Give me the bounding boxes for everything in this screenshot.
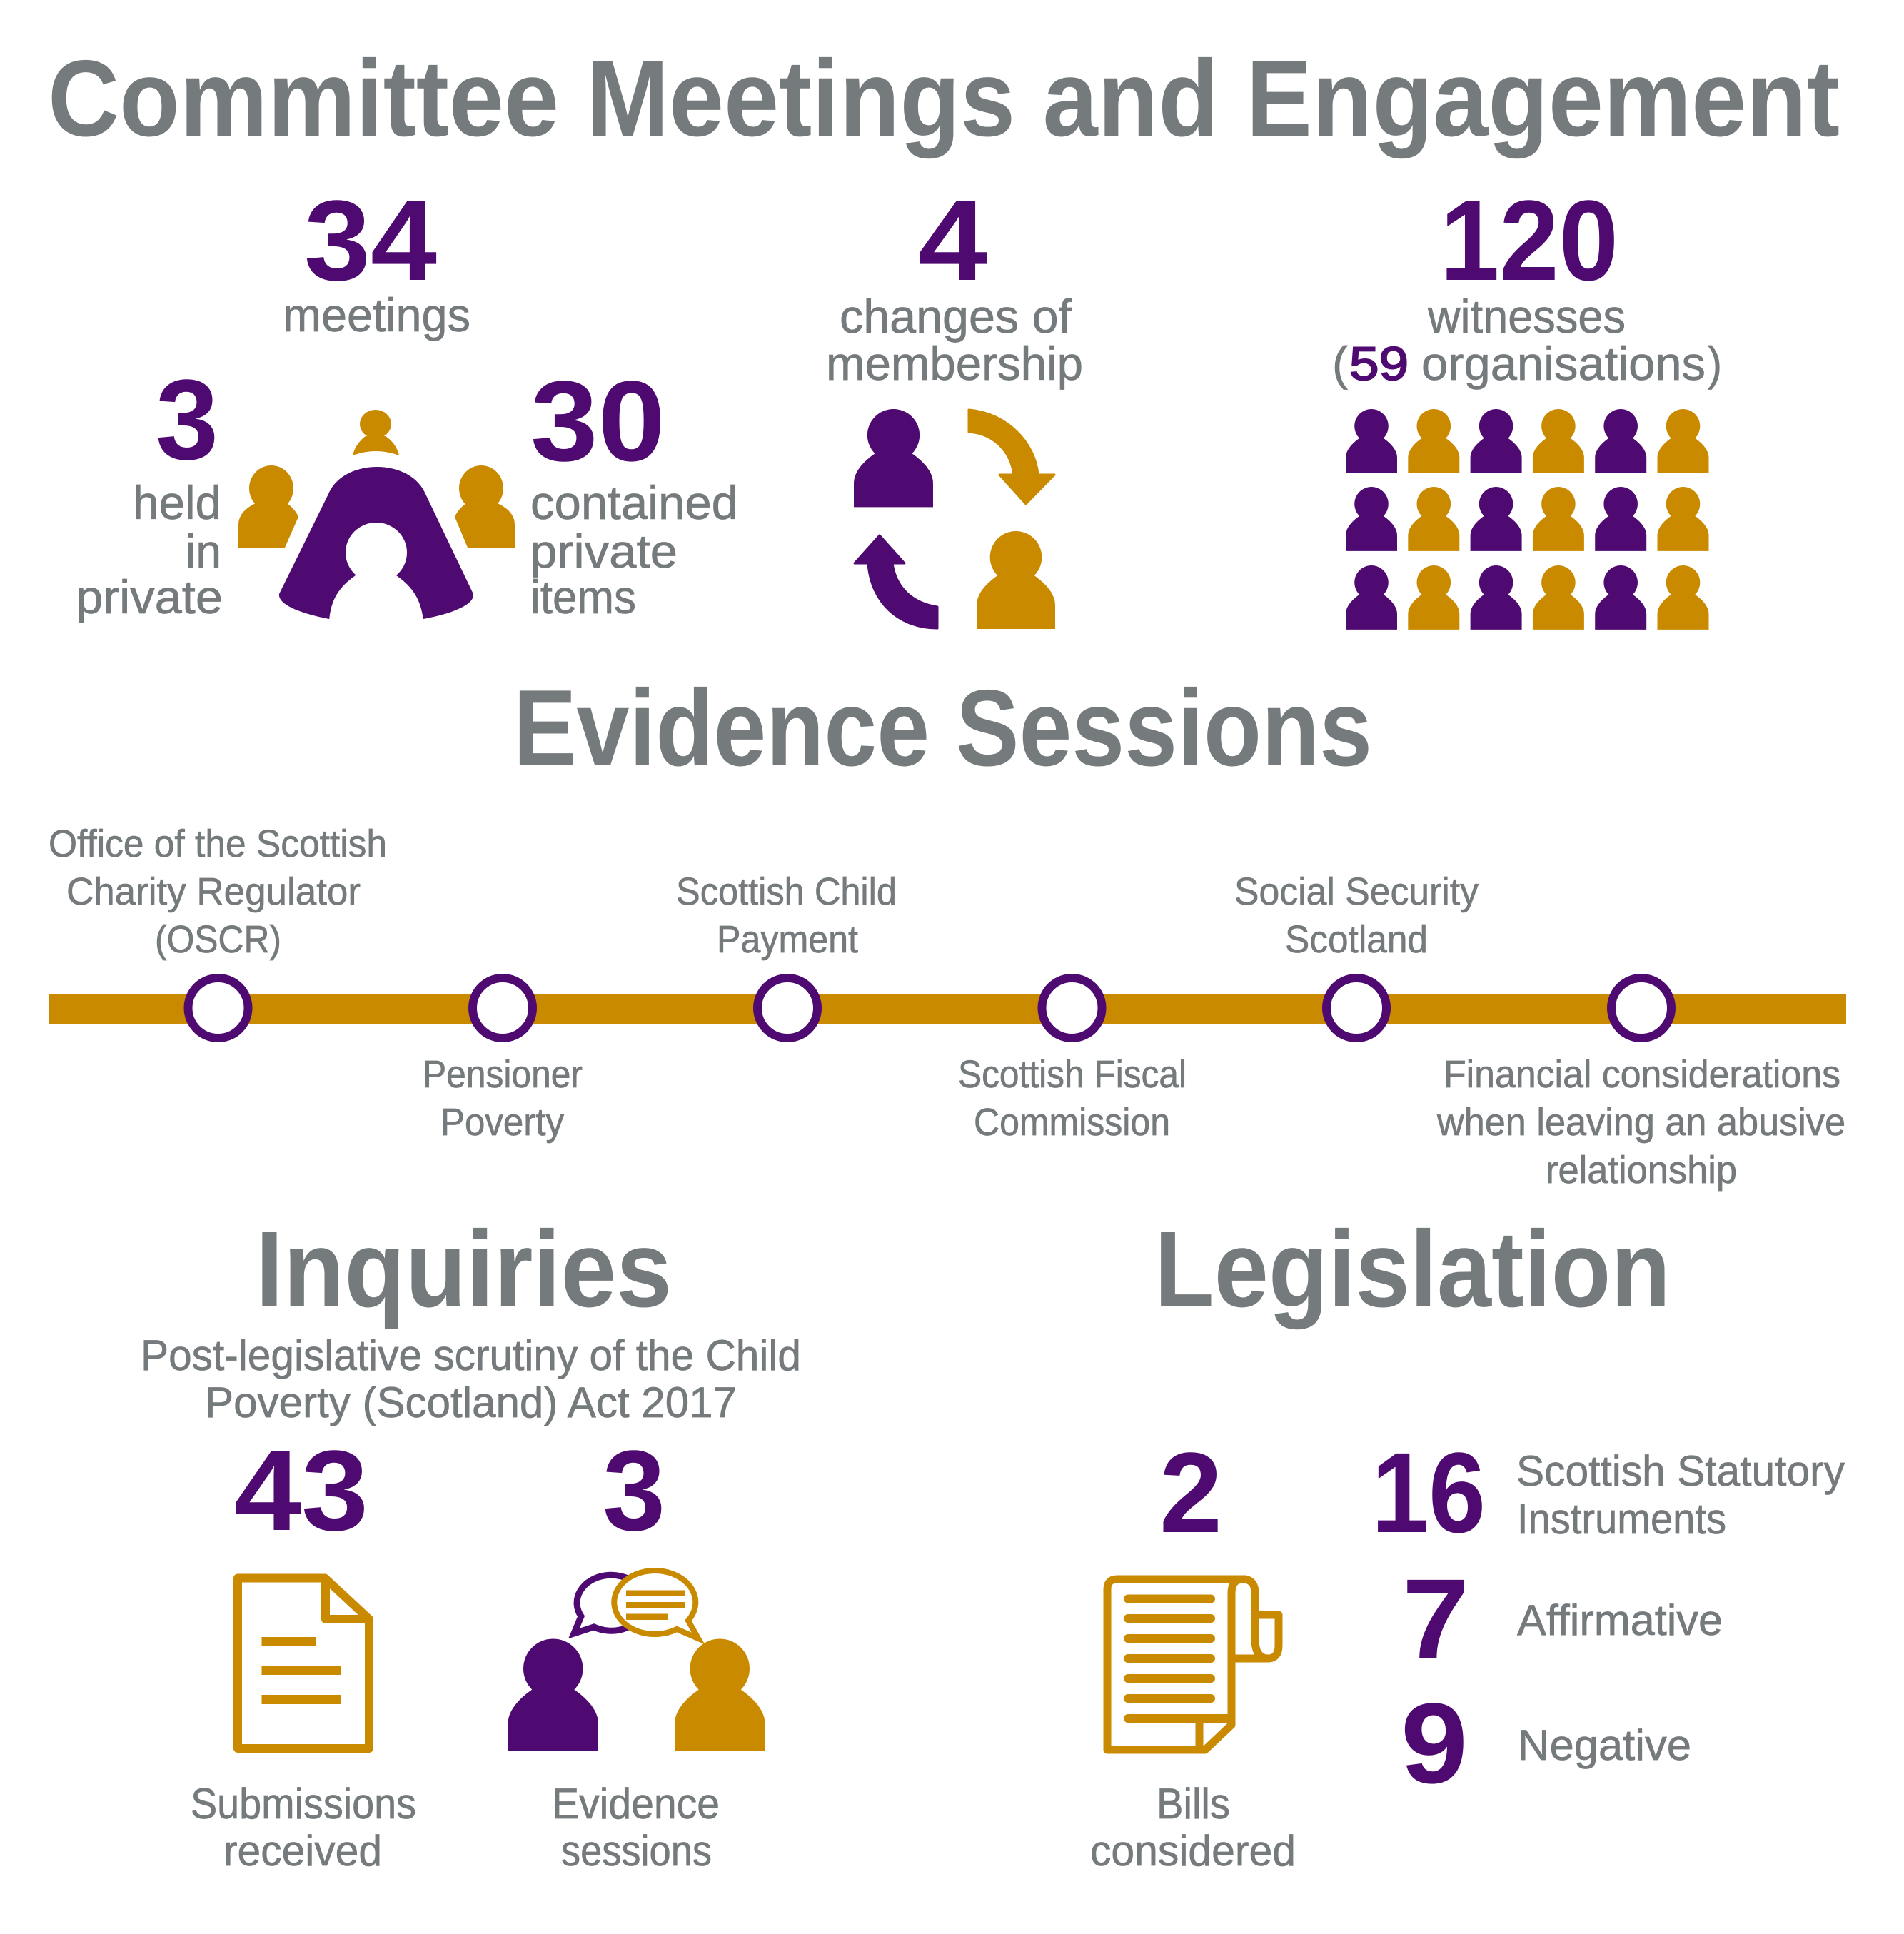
inquiry subtitle (141, 1331, 801, 1426)
stat: 30 contained private items (530, 357, 738, 623)
stat: 7 affirmative (1402, 1555, 1723, 1683)
timeline label: pensioner poverty: Pensioner (423, 1053, 583, 1096)
stat: 120 witnesses from 59 organisations: witnesses (1427, 290, 1626, 343)
stat: 2 bills considered: Bills (1157, 1780, 1230, 1828)
stat: 9 negative (1401, 1679, 1691, 1807)
stat: 120 witnesses from 59 organisations: 59 (1349, 337, 1409, 390)
stat: 16 scottish statutory instruments: Instruments (1517, 1495, 1726, 1543)
inquiry subtitle: Post-legislative scrutiny of the Child (141, 1331, 801, 1379)
stat: 3 held in private: in (186, 525, 221, 578)
stat: 4 changes of membership: membership (826, 337, 1083, 390)
timeline label: OSCR: (OSCR) (155, 918, 281, 961)
stat: 3 evidence sessions: 3 (603, 1426, 665, 1554)
timeline label: OSCR: Charity Regulator (66, 870, 361, 913)
stat: 34 meetings: 34 (304, 176, 437, 304)
stat: 3 held in private: held (133, 476, 221, 529)
stat: 16 scottish statutory instruments (1371, 1429, 1845, 1556)
stat: 3 evidence sessions: Evidence (552, 1780, 720, 1828)
timeline label: financial considerations: when leaving an abusive (1436, 1101, 1845, 1144)
stat: 3 held in private: 3 (156, 356, 218, 483)
stat: 43 submissions received: 43 (234, 1426, 368, 1554)
timeline of evidence sessions (49, 978, 1846, 1038)
stat: 120 witnesses from 59 organisations (1332, 176, 1722, 390)
timeline label: social security scotland: Scotland (1285, 918, 1428, 961)
timeline label: financial considerations: Financial considerations (1444, 1053, 1840, 1096)
stat: 30 contained private items: 30 (530, 357, 665, 485)
stat: 16 scottish statutory instruments: 16 (1371, 1429, 1486, 1556)
timeline label: scottish child payment (676, 870, 897, 961)
stat: 4 changes of membership: 4 (918, 176, 987, 304)
stat: 3 evidence sessions (552, 1426, 720, 1875)
heading: inquiries: Inquiries (256, 1209, 672, 1330)
stat: 43 submissions received: received (223, 1827, 382, 1875)
icon: meeting table with people (238, 410, 515, 621)
stat: 3 evidence sessions: sessions (561, 1827, 712, 1875)
timeline label: pensioner poverty (423, 1053, 583, 1144)
timeline label: OSCR: Office of the Scottish (49, 822, 387, 865)
heading: legislation: Legislation (1154, 1209, 1671, 1330)
stat: 34 meetings (283, 176, 470, 341)
stat: 2 bills considered: 2 (1159, 1429, 1222, 1556)
timeline label: scottish fiscal commission: Commission (974, 1101, 1170, 1144)
timeline label: social security scotland (1234, 870, 1479, 961)
stat: 30 contained private items: private (530, 525, 678, 578)
timeline label: social security scotland: Social Security (1234, 870, 1479, 913)
stat: 4 changes of membership (826, 176, 1083, 390)
timeline label: scottish fiscal commission (958, 1053, 1187, 1144)
icon: bill scroll (1107, 1579, 1279, 1750)
timeline label: financial considerations: relationship (1546, 1149, 1737, 1192)
stat: 120 witnesses from 59 organisations: organisations (1421, 337, 1706, 390)
stat: 9 negative: Negative (1518, 1721, 1691, 1769)
stat: 43 submissions received: Submissions (191, 1780, 416, 1828)
timeline label: pensioner poverty: Poverty (440, 1101, 564, 1144)
stat: 4 changes of membership: changes of (840, 290, 1072, 343)
heading: evidence sessions: Evidence Sessions (513, 668, 1372, 789)
timeline label: scottish child payment: Scottish Child (676, 870, 897, 913)
timeline label: financial considerations (1436, 1053, 1845, 1192)
icon: grid of witnesses (1346, 409, 1709, 630)
stat: 120 witnesses from 59 organisations: 120 (1440, 176, 1618, 304)
timeline label: OSCR (49, 822, 387, 961)
timeline label: scottish child payment: Payment (717, 918, 858, 961)
icon: document (238, 1578, 369, 1748)
stat: 120 witnesses from 59 organisations: ) (1708, 337, 1722, 390)
stat: 2 bills considered (1090, 1429, 1296, 1875)
stat: 3 held in private: private (76, 570, 223, 623)
stat: 34 meetings: meetings (283, 288, 470, 341)
stat: 3 held in private (76, 356, 223, 623)
stat: 43 submissions received (191, 1426, 416, 1875)
stat: 30 contained private items: items (530, 570, 636, 623)
stat: 2 bills considered: considered (1090, 1827, 1296, 1875)
stat: 16 scottish statutory instruments: Scottish Statutory (1516, 1447, 1845, 1495)
stat: 7 affirmative: 7 (1402, 1555, 1469, 1683)
stat: 7 affirmative: Affirmative (1517, 1596, 1723, 1644)
icon: two people talking (508, 1571, 765, 1751)
stat: 9 negative: 9 (1401, 1679, 1468, 1807)
stat: 120 witnesses from 59 organisations: ( (1332, 337, 1348, 390)
inquiry subtitle: Poverty (Scotland) Act 2017 (205, 1379, 737, 1426)
timeline label: scottish fiscal commission: Scottish Fiscal (958, 1053, 1187, 1096)
stat: 30 contained private items: contained (530, 476, 738, 529)
icon: membership change cycle (854, 409, 1055, 629)
